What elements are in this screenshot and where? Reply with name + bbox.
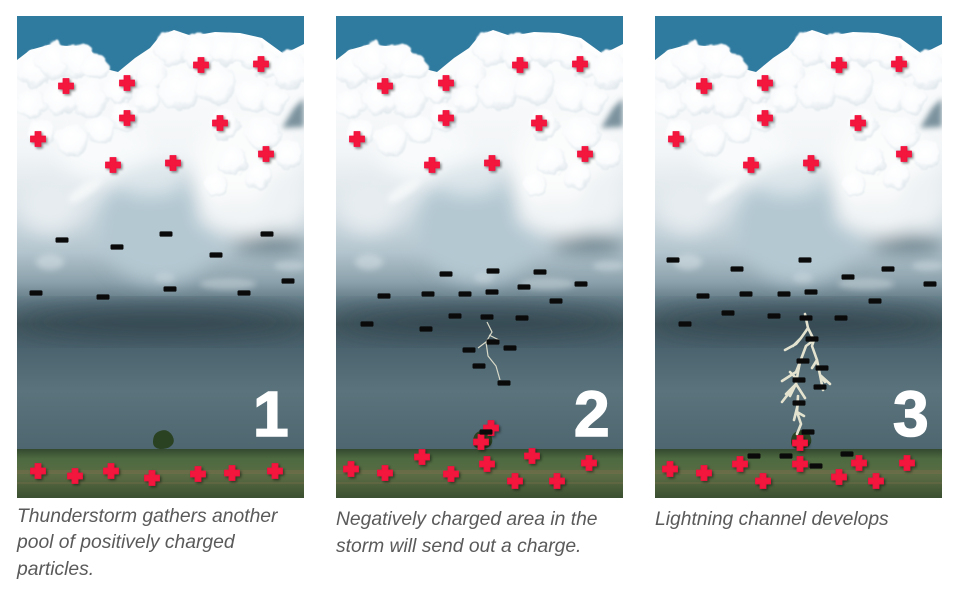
panel 1 tree <box>153 430 174 449</box>
panel 1 number: 1 <box>253 378 289 450</box>
panel 1 positive charges <box>30 56 282 486</box>
panel 2 scene photo <box>329 16 629 498</box>
caption 3: Lightning channel develops <box>655 509 889 530</box>
panel 1 negative charges <box>30 231 294 300</box>
panel 2 negative charges <box>360 268 588 435</box>
caption 2: storm will send out a charge. <box>336 536 581 557</box>
panel 2 leader lightning <box>478 322 500 380</box>
caption 1: pool of positively charged <box>16 532 236 553</box>
panel 3 lightning channel <box>782 314 830 434</box>
panel 3 scene photo <box>648 16 948 498</box>
panel 2: negative area sends out a charge <box>329 16 629 498</box>
panel 2 positive charges <box>344 56 596 488</box>
panel 3 number: 3 <box>893 378 929 450</box>
panel 2 tree <box>473 430 492 449</box>
panel 3: lightning channel develops <box>648 16 948 498</box>
panel 3 positive charges <box>662 56 914 488</box>
panel 3 negative charges <box>666 257 936 469</box>
panel 1: thunderstorm gathers charge <box>10 16 310 498</box>
panel 2 number: 2 <box>574 378 610 450</box>
caption 1: Thunderstorm gathers another <box>17 506 279 527</box>
caption 1: particles. <box>16 559 94 580</box>
panel 3 tree <box>791 430 811 449</box>
panel 1 scene photo <box>10 16 310 498</box>
caption 2: Negatively charged area in the <box>336 509 598 530</box>
